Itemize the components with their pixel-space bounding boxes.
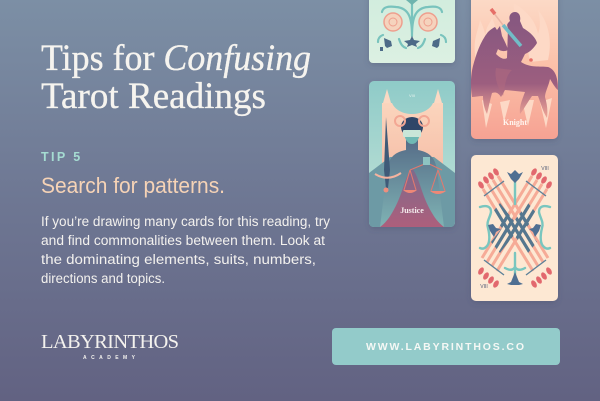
vines — [480, 178, 550, 277]
website button: WWW.LABYRINTHOS.CO — [366, 341, 524, 353]
flowers — [488, 170, 541, 285]
wand tips — [477, 167, 553, 289]
body text: and find commonalities between them. Look at — [41, 233, 325, 248]
title: Tarot Readings — [41, 75, 266, 116]
archway — [382, 103, 443, 190]
card: Justice: VIII — [409, 93, 415, 98]
crossed wands coral — [482, 176, 548, 271]
title — [41, 37, 311, 116]
roman numerals — [480, 166, 549, 290]
woven centre — [491, 203, 537, 253]
figure — [380, 140, 444, 227]
logo: Labyrinthos Academy: LABYRINTHOS — [41, 331, 179, 353]
body text: the dominating elements, suits, numbers, — [41, 252, 316, 267]
roman numerals: VIII — [480, 284, 488, 290]
floor — [369, 157, 455, 227]
rider leg — [495, 68, 512, 96]
card: Eight of Wands — [471, 155, 558, 301]
wand ties — [484, 181, 546, 275]
roman numerals: VIII — [541, 166, 549, 172]
card: ornamental mint card — [369, 0, 455, 63]
card label: Justice — [400, 206, 424, 215]
tip number: TIP 5 — [41, 150, 83, 164]
body text: If you’re drawing many cards for this reading, try — [41, 214, 330, 229]
body text: directions and topics. — [41, 271, 165, 286]
sword — [384, 117, 390, 188]
website button — [332, 328, 560, 365]
scales — [404, 163, 445, 191]
spear — [503, 25, 521, 46]
horse and rider — [471, 12, 558, 118]
logo: Labyrinthos Academy: ACADEMY — [83, 355, 136, 361]
card: Justice — [369, 81, 455, 227]
body text — [41, 214, 330, 286]
subheading: Search for patterns. — [41, 173, 225, 198]
title: Tips for Confusing — [41, 37, 311, 78]
head and blindfold — [401, 117, 423, 137]
flames — [475, 3, 552, 128]
card label: Knight — [503, 118, 527, 127]
card: Knight — [471, 0, 558, 139]
